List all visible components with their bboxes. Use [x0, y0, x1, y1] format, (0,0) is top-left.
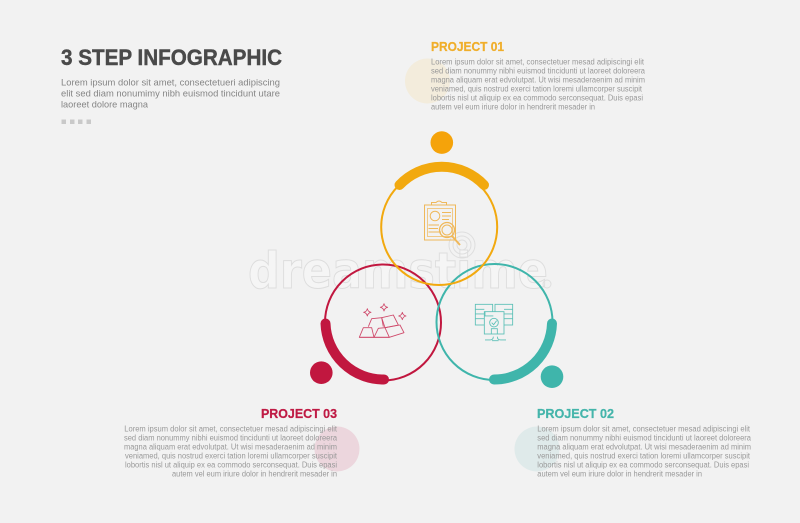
project 01 text — [431, 58, 646, 112]
step 3 ring: red — [325, 264, 441, 380]
watermark: dreamstime — [248, 242, 548, 300]
step 2 ring: teal — [436, 264, 552, 380]
project 03 text: lobortis nisl ut aliquip ex ea commodo serconsequat. Duis epasi — [125, 460, 337, 469]
icon: documents with hand and check — [475, 304, 513, 341]
project 01 text: magna aliquam erat edvolutpat. Ut wisi mesaderaenim ad minim — [431, 76, 645, 85]
pale circle: project 02 — [514, 426, 560, 472]
dot: yellow — [430, 131, 453, 154]
project 03 text: magna aliquam erat edvolutpat. Ut wisi mesaderaenim ad minim — [124, 442, 337, 452]
project 01 text: sed diam nonummy nibhi euismod tincidunti ut laoreet doloreera — [431, 66, 646, 76]
intro text block: elit sed diam nonumimy nibh euismod tincidunt utare — [61, 88, 280, 100]
project 02 text — [537, 424, 752, 479]
project 01 text: lobortis nisl ut aliquip ex ea commodo serconsequat. Duis epasi — [431, 94, 643, 103]
intro text block: Lorem ipsum dolor sit amet, consectetueri adipiscing — [61, 78, 280, 88]
project 02 text: autem vel eum iriure dolor in hendrerit mesader in — [537, 470, 702, 479]
icon: clipboard with magnifier — [424, 201, 460, 245]
project 03 text: sed diam nonummy nibhi euismod tincidunti ut laoreet doloreera — [124, 434, 338, 442]
project 02 text: Lorem ipsum dolor sit amet, consectetuer mesad adipiscingi elit — [537, 424, 751, 434]
dot: teal — [541, 365, 563, 388]
pale circle: project 03 — [314, 426, 360, 472]
dot: red — [310, 361, 333, 384]
project 01 heading: PROJECT 01 — [431, 39, 504, 54]
step 1 ring: yellow — [381, 167, 497, 285]
project 03 heading: PROJECT 03 — [261, 406, 337, 421]
pagination squares — [62, 120, 91, 124]
project 02 text: veniamed, quis nostrud exerci tation loremi ullamcorper suscipit — [537, 451, 751, 460]
intro text block — [61, 78, 280, 110]
project 03 text — [124, 424, 338, 479]
project 03 text: Lorem ipsum dolor sit amet, consectetuer mesad adipiscingi elit — [124, 424, 338, 434]
project 03 text: veniamed, quis nostrud exerci tation loremi ullamcorper suscipit — [125, 451, 338, 460]
project 02 text: lobortis nisl ut aliquip ex ea commodo serconsequat. Duis epasi — [537, 460, 749, 469]
project 03 text: autem vel eum iriure dolor in hendrerit mesader in — [172, 470, 337, 479]
project 02 text: sed diam nonummy nibhi euismod tincidunti ut laoreet doloreera — [537, 434, 752, 442]
project 02 text: magna aliquam erat edvolutpat. Ut wisi mesaderaenim ad minim — [537, 442, 751, 452]
pale circle: project 01 — [405, 58, 450, 104]
project 02 heading: PROJECT 02 — [537, 406, 614, 421]
project 01 text: Lorem ipsum dolor sit amet, consectetuer mesad adipiscingi elit — [431, 58, 645, 66]
icon: gold bars — [359, 304, 406, 337]
title: 3 STEP INFOGRAPHIC — [61, 45, 282, 70]
project 01 text: autem vel eum iriure dolor in hendrerit mesader in — [431, 103, 595, 112]
project 01 text: veniamed, quis nostrud exerci tation loremi ullamcorper suscipit — [431, 85, 643, 94]
intro text block: laoreet dolore magna — [61, 100, 149, 110]
